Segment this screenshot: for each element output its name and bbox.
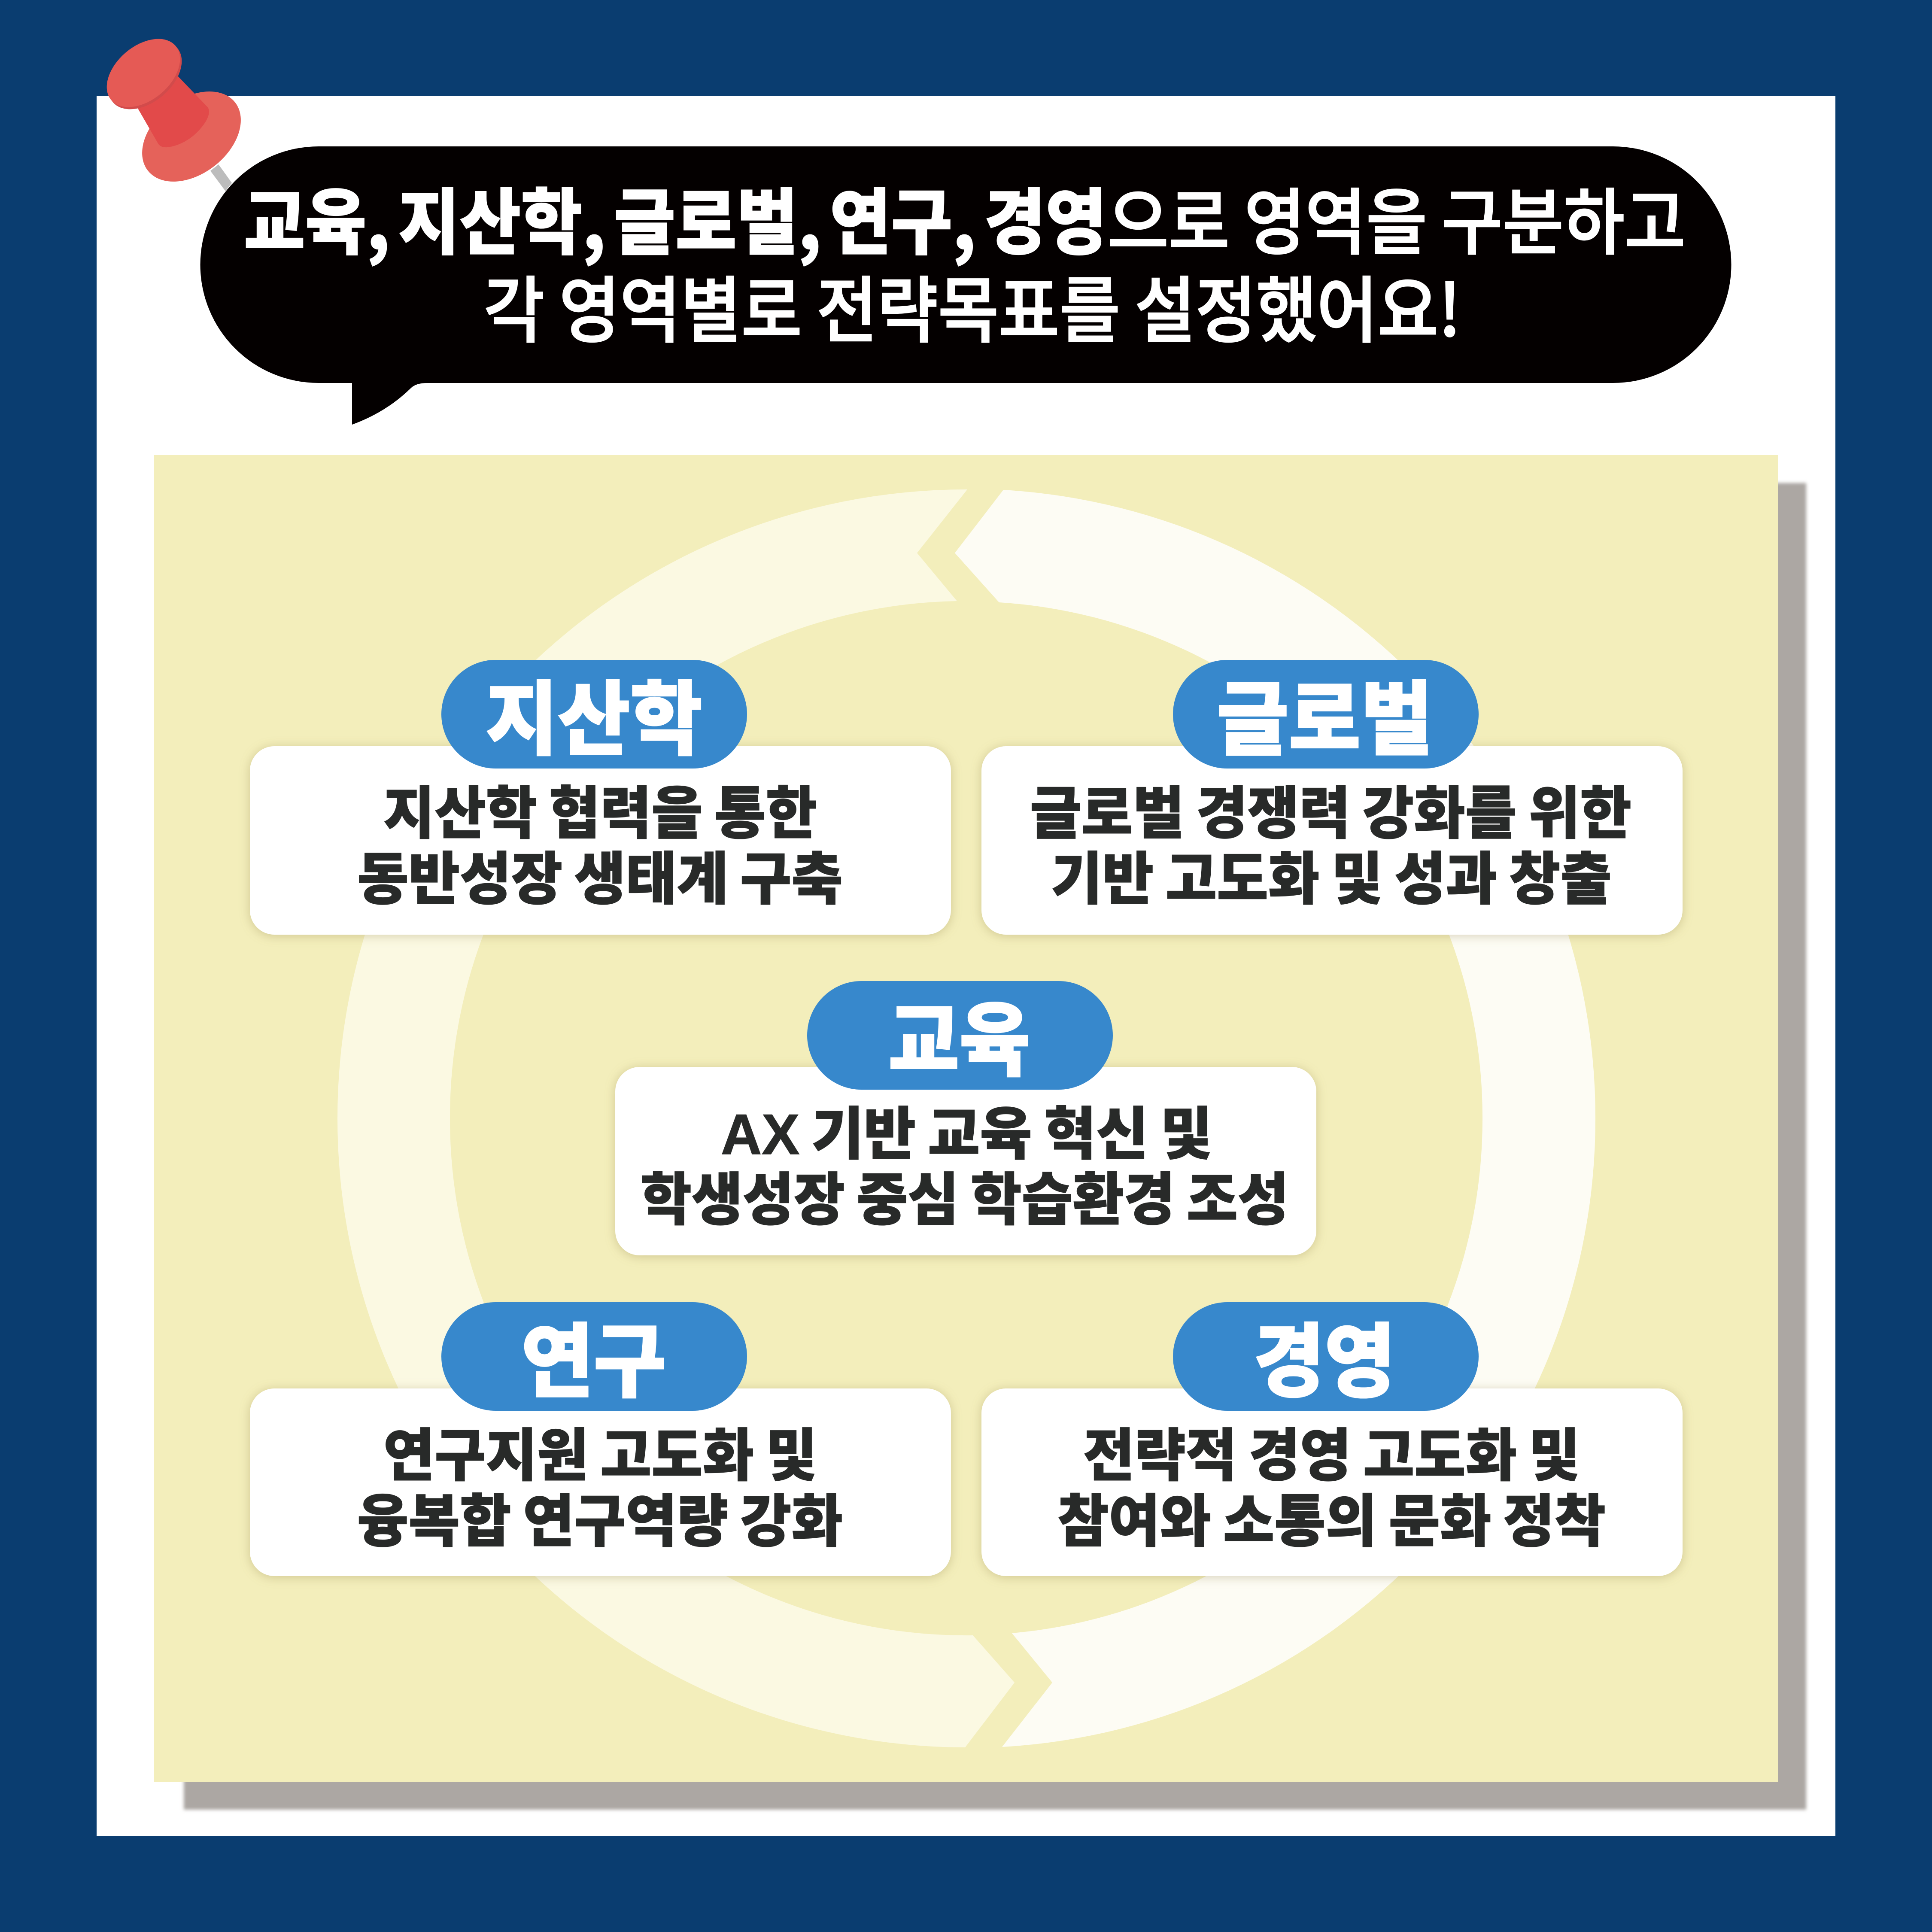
panel: 글로벌: 글로벌 경쟁력 강화를 위한 [1030,768,1631,850]
panel: 교육: AX 기반 교육 혁신 및 [721,1088,1212,1171]
panel: 교육: 학생성장 중심 학습환경 조성 [641,1154,1289,1236]
panel: 연구: 연구 [521,1297,666,1414]
panel: 글로벌 [981,655,1683,935]
panel: 연구: 연구지원 고도화 및 [383,1410,817,1492]
title: 으로 영역을 구분하고 [1108,165,1686,269]
panel: 연구: 융복합 연구역량 강화 [357,1476,843,1558]
panel: 글로벌: 기반 고도화 및 성과 창출 [1051,833,1612,916]
title [244,165,1686,357]
panel: 지산학: 지산학 [486,655,702,772]
panel: 연구 [250,1297,951,1576]
panel: 지산학: 지산학 협력을 통한 [383,768,817,850]
panel: 지산학 [250,655,951,935]
panel shadow [184,483,1806,1810]
panel: 경영 [981,1297,1683,1576]
panel: 글로벌: 글로벌 [1217,655,1433,772]
title: 교육, 지산학, 글로벌, 연구, 경영 [244,165,1107,269]
panel: 경영: 참여와 소통의 문화 정착 [1057,1476,1606,1558]
cycle arrow: left half [337,489,1015,1747]
panel: 지산학: 동반성장 생태계 구축 [357,833,843,916]
title: 각 영역별로 전략목표를 설정했어요! [484,253,1461,357]
panel: 경영: 전략적 경영 고도화 및 [1083,1410,1580,1492]
panel: 교육: 교육 [888,976,1030,1093]
cycle arrow: right half [955,490,1595,1747]
panel: 교육 [615,976,1316,1255]
panel: 경영: 경영 [1254,1297,1395,1414]
panel: strategy area [154,455,1778,1782]
speech bubble [200,146,1731,425]
icon: push pin [94,25,258,200]
